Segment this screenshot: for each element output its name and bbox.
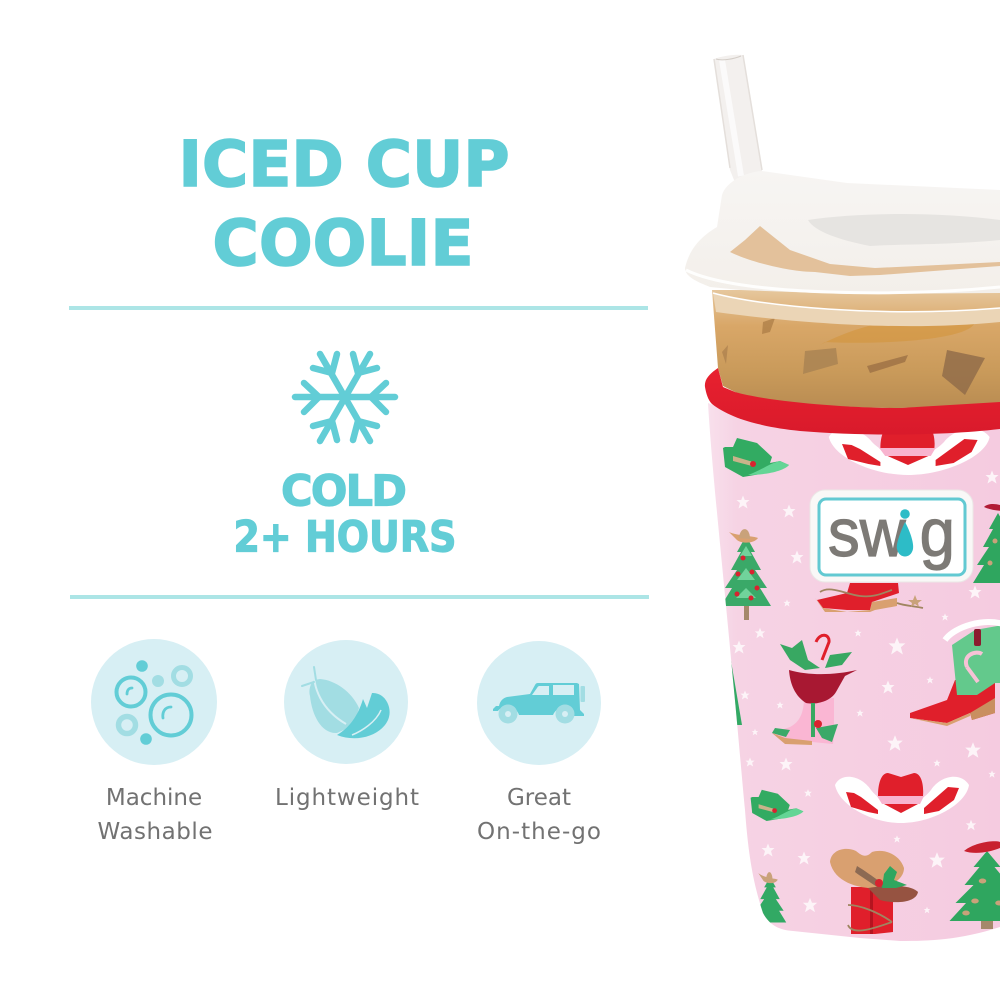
label: lightweight: Lightweight [275, 785, 419, 811]
pattern: stars [732, 470, 998, 913]
pattern: green hats [723, 438, 803, 821]
title: ICED CUP [178, 128, 510, 201]
iced coffee [712, 290, 1000, 408]
sleeve print [721, 425, 1000, 934]
feature: machine washable [91, 639, 217, 845]
lid [685, 171, 1000, 294]
heading: cold 2+ hours: COLD [281, 466, 407, 516]
badge: swig logo [810, 490, 973, 582]
title [178, 128, 510, 280]
pattern: red hats [829, 425, 990, 823]
badge: swig logo: swig [828, 495, 955, 571]
label: machine washable: Washable [98, 819, 212, 845]
label: machine washable [98, 785, 212, 845]
heading: cold 2+ hours [234, 466, 456, 562]
heading: cold 2+ hours: 2+ HOURS [234, 512, 456, 562]
title: COOLIE [212, 207, 474, 280]
icon: snowflake [295, 354, 395, 441]
pattern: pink boot with bandana [772, 635, 857, 745]
label: great on-the-go [477, 785, 601, 845]
pattern: cowboy hat on red boots [830, 849, 918, 934]
coolie sleeve [708, 403, 1000, 941]
pattern: red boot top right [910, 622, 1000, 726]
product photo: iced cup with coolie [685, 55, 1000, 941]
icon: feather [284, 640, 408, 764]
feature: lightweight [275, 640, 419, 811]
red collar [705, 368, 1000, 435]
pattern: christmas trees [721, 504, 1000, 929]
label: great on-the-go: Great [507, 785, 571, 811]
label: machine washable: Machine [106, 785, 202, 811]
feature: great on-the-go [477, 641, 601, 845]
icon: bubbles [91, 639, 217, 765]
pattern: red boot under badge [815, 583, 923, 612]
icon: jeep [477, 641, 601, 765]
label: great on-the-go: On-the-go [477, 819, 601, 845]
straw [714, 55, 762, 205]
